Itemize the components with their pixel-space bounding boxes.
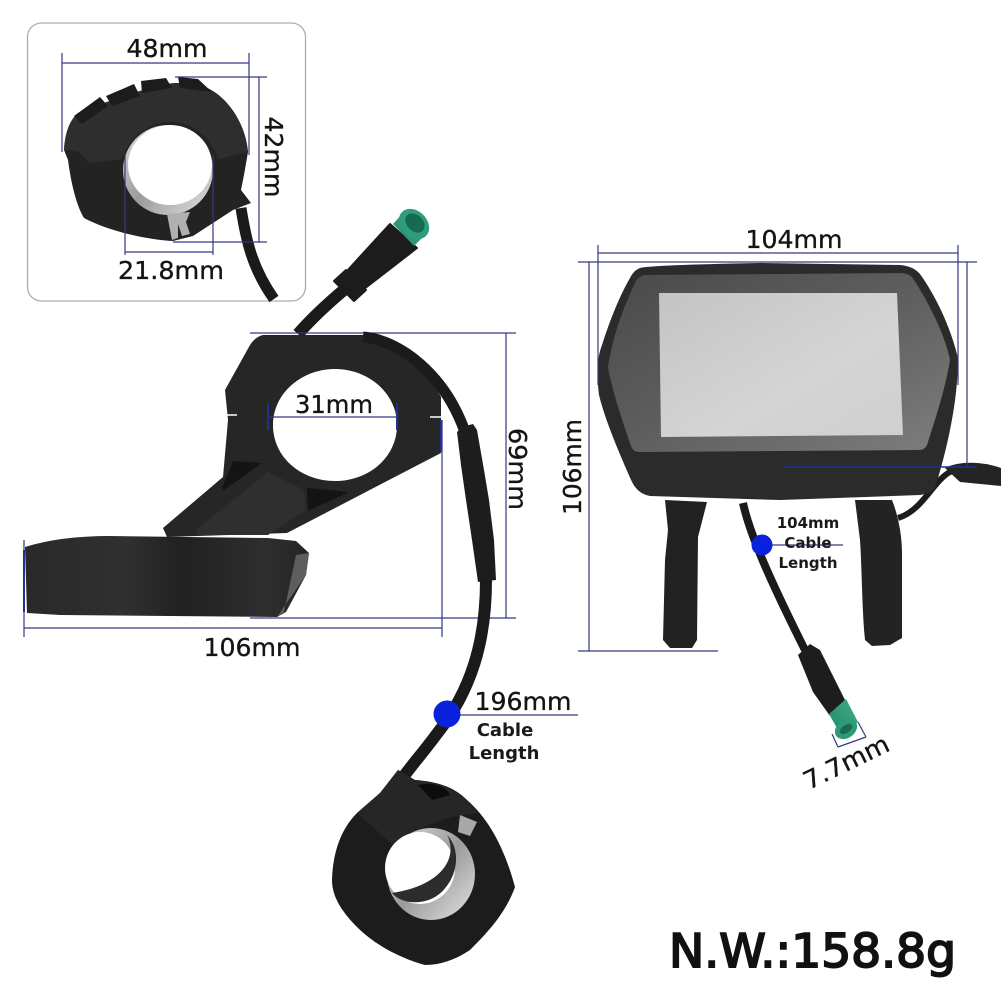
text: 31mm: 31mm [295, 390, 373, 419]
marker: blue dot [434, 700, 460, 728]
icon: bezel [608, 273, 950, 452]
dimension lines of throttle [24, 333, 516, 637]
text: 196mm: 196mm [474, 687, 572, 716]
text: 104mm small: 104mm [777, 514, 839, 532]
dimension lines of inset [62, 53, 267, 255]
panel: thumb throttle side view [24, 333, 532, 662]
icon: side cable [898, 470, 955, 518]
text: 42mm: 42mm [259, 116, 288, 198]
text: 48mm: 48mm [126, 34, 208, 63]
icon: mounting legs [663, 500, 902, 648]
callout: 104mm cable length [752, 514, 843, 572]
text: cable length: Cable [477, 720, 533, 741]
decorative highlight [783, 466, 977, 468]
text: 106mm: 106mm [204, 633, 300, 662]
callout: 196mm cable length [434, 687, 578, 764]
decorative split [225, 415, 441, 417]
icon: display housing [598, 263, 958, 500]
decorative edge [277, 553, 309, 617]
text: cable length: Length [469, 743, 539, 764]
panel: display unit [558, 225, 1001, 651]
icon: upper cable with green connector [298, 203, 435, 334]
icon: screen [659, 293, 903, 437]
text: 104mm small: Cable [784, 534, 832, 552]
text: 21.8mm: 21.8mm [118, 256, 224, 285]
callout: 7.7mm connector width [799, 722, 894, 796]
text: 69mm: 69mm [503, 428, 532, 510]
text: 104mm width: 104mm [746, 225, 842, 254]
icon: lower round button clamp [332, 770, 515, 965]
icon: long cable with inline connector [363, 337, 496, 776]
icon: connector end on side cable [945, 463, 1001, 486]
text: 104mm small: Length [778, 554, 838, 572]
icon: throttle clamp [163, 335, 441, 537]
icon: throttle clamp facets [196, 472, 306, 535]
icon: metal ring [123, 125, 213, 215]
marker: blue dot [752, 534, 772, 556]
icon: cable of button clamp [241, 208, 274, 299]
icon: metal ring [387, 828, 475, 920]
decorative ticks [24, 403, 441, 612]
icon: button clamp body [64, 77, 251, 241]
text: 7.7mm: 7.7mm [799, 729, 894, 796]
icon: throttle paddle [25, 536, 309, 617]
dimension lines of display [578, 245, 977, 651]
icon: lower cable with green connector [743, 503, 861, 743]
text: net weight: N.W.:158.8g [669, 924, 956, 978]
panel: inset handlebar button clamp [28, 23, 306, 301]
text: 106mm height: 106mm [558, 419, 587, 515]
